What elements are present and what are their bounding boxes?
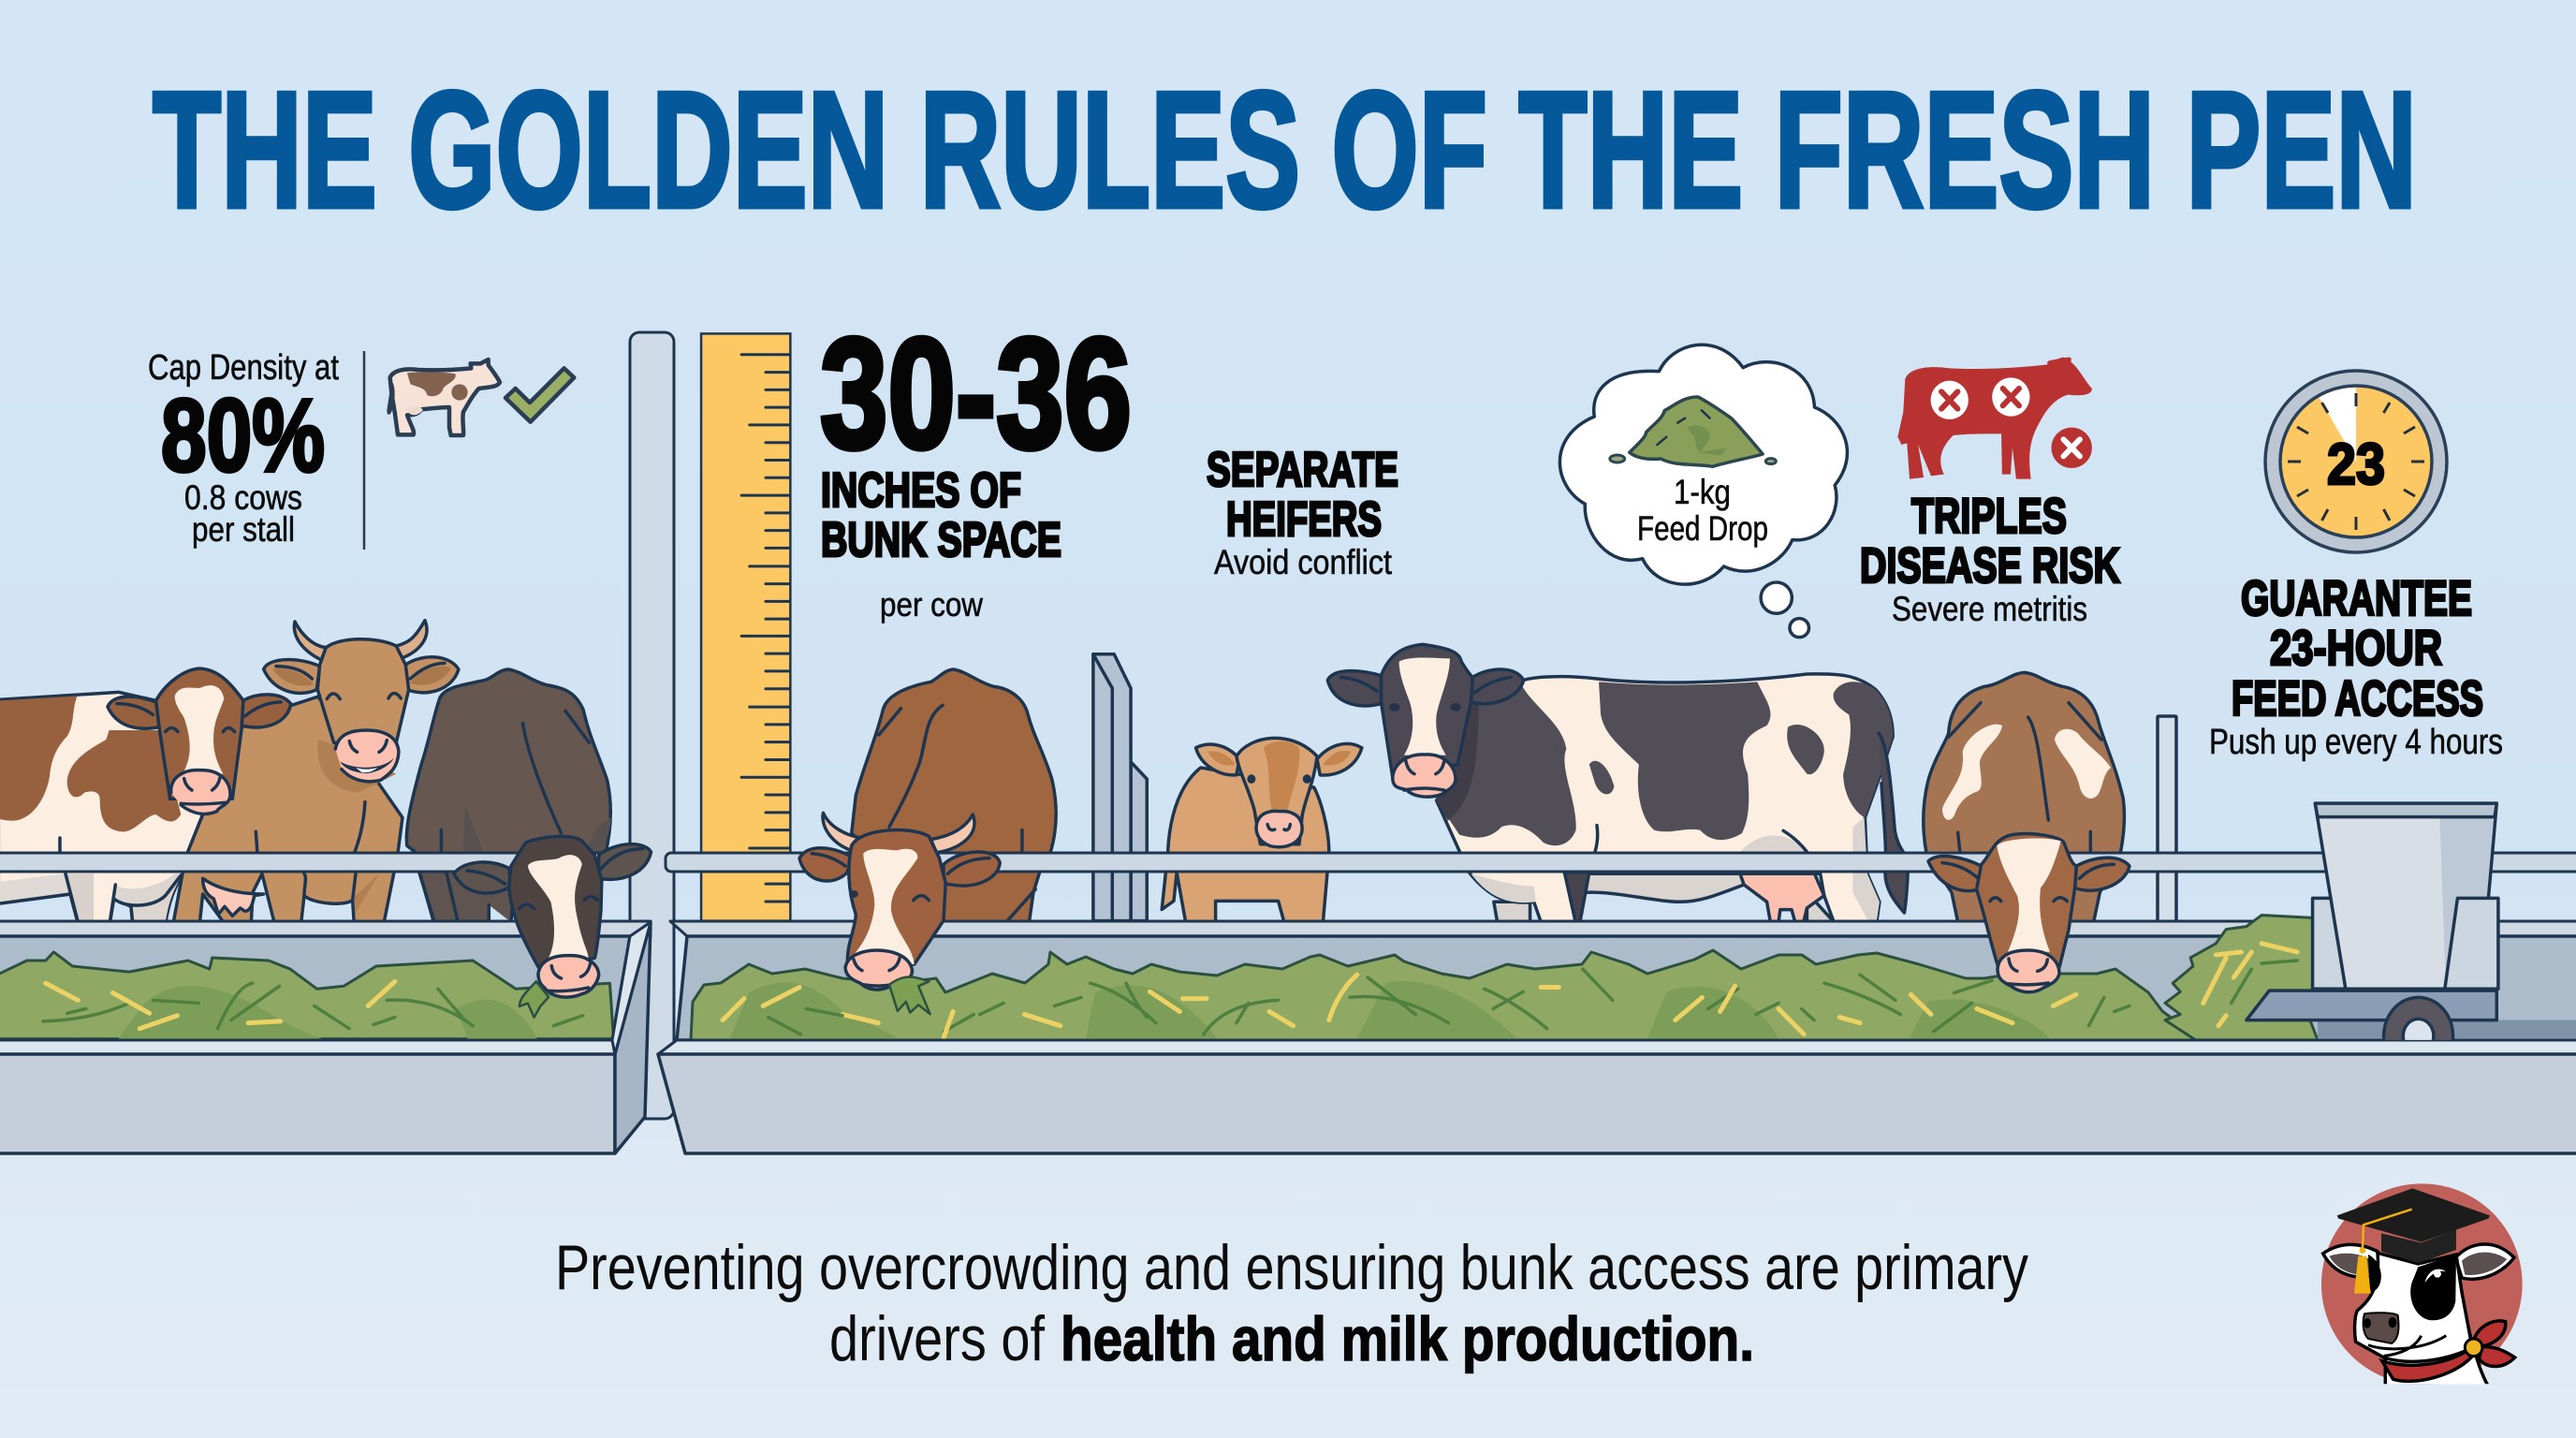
stat: guarantee feed access: Push up every 4 hours	[2209, 723, 2503, 762]
pen divider	[1093, 654, 1147, 921]
stat: guarantee feed access: GUARANTEE	[2241, 571, 2472, 626]
icon: feed pile	[1610, 397, 1776, 466]
stat: bunk space: BUNK SPACE	[821, 513, 1061, 567]
cow: brown rear with white patches	[1924, 672, 2124, 922]
fence post	[630, 332, 674, 1119]
footer message	[555, 1232, 2028, 1374]
cow: tan standing	[173, 621, 459, 924]
stat: triples disease risk: TRIPLES	[1911, 489, 2067, 544]
thought bubble: feed drop: 1-kg	[1674, 473, 1731, 511]
stat: bunk space: 30-36	[820, 305, 1132, 481]
icon: red cow disease risk	[1897, 358, 2092, 479]
stat: bunk space	[820, 305, 1132, 624]
stat: cap density: per stall	[192, 510, 295, 549]
feed: left bunk	[0, 952, 614, 1039]
stat: guarantee feed access: FEED ACCESS	[2232, 671, 2483, 726]
icon: 23-hour clock: 23	[2327, 433, 2385, 497]
thought bubble: feed drop	[1559, 345, 1847, 638]
stat: cap density: Cap Density at	[148, 348, 339, 388]
calf: separate heifers	[1162, 738, 1362, 922]
stat: separate heifers: HEIFERS	[1226, 492, 1382, 547]
stat: separate heifers	[1207, 443, 1398, 581]
eating cow head: dark	[454, 836, 651, 1018]
stat: cap density	[148, 348, 339, 549]
stat: triples disease risk: DISEASE RISK	[1860, 538, 2120, 594]
feed bunk: right	[658, 916, 2576, 1153]
cow: holstein	[1327, 644, 1909, 924]
stat: cap density: 80%	[161, 378, 325, 493]
holstein head	[1327, 644, 1524, 797]
cow: brown rear eating	[852, 669, 1056, 922]
stat: separate heifers: Avoid conflict	[1214, 543, 1393, 581]
mascot: cow with graduation cap	[2321, 1183, 2523, 1388]
icon: small cow with check	[387, 360, 574, 435]
feed push-up wagon	[2245, 801, 2576, 1040]
footer message: Preventing overcrowding and ensuring bunk access are primary	[555, 1232, 2028, 1303]
stat: guarantee feed access: 23-HOUR	[2270, 621, 2442, 676]
stat: cap density: 0.8 cows	[184, 478, 302, 517]
stat: triples disease risk: Severe metritis	[1892, 590, 2087, 628]
stat: bunk space: INCHES OF	[821, 463, 1021, 518]
eating cow head: brown	[1928, 834, 2130, 992]
fence rails	[0, 853, 2576, 872]
stat: separate heifers: SEPARATE	[1207, 443, 1398, 497]
eating cow head: brown horned	[799, 813, 1000, 1014]
feed bunk: left	[0, 921, 651, 1153]
feed pile by wagon	[2165, 916, 2318, 1040]
cow: brown and white, left	[0, 692, 203, 924]
divider line	[363, 351, 365, 550]
thought bubble: feed drop: Feed Drop	[1637, 509, 1768, 548]
footer message: drivers of	[829, 1303, 1045, 1374]
cow head: brown and white	[108, 668, 291, 814]
cow: dark rear	[406, 669, 611, 922]
stat: guarantee feed access	[2209, 571, 2503, 762]
icon: 23-hour clock	[2265, 371, 2447, 552]
feed: right bunk	[691, 950, 2195, 1040]
ruler: bunk space	[701, 333, 790, 921]
footer message: health and milk production.	[1061, 1304, 1754, 1373]
stat: bunk space: per cow	[880, 585, 984, 624]
stat: triples disease risk	[1860, 489, 2120, 628]
rear post	[2158, 716, 2176, 922]
